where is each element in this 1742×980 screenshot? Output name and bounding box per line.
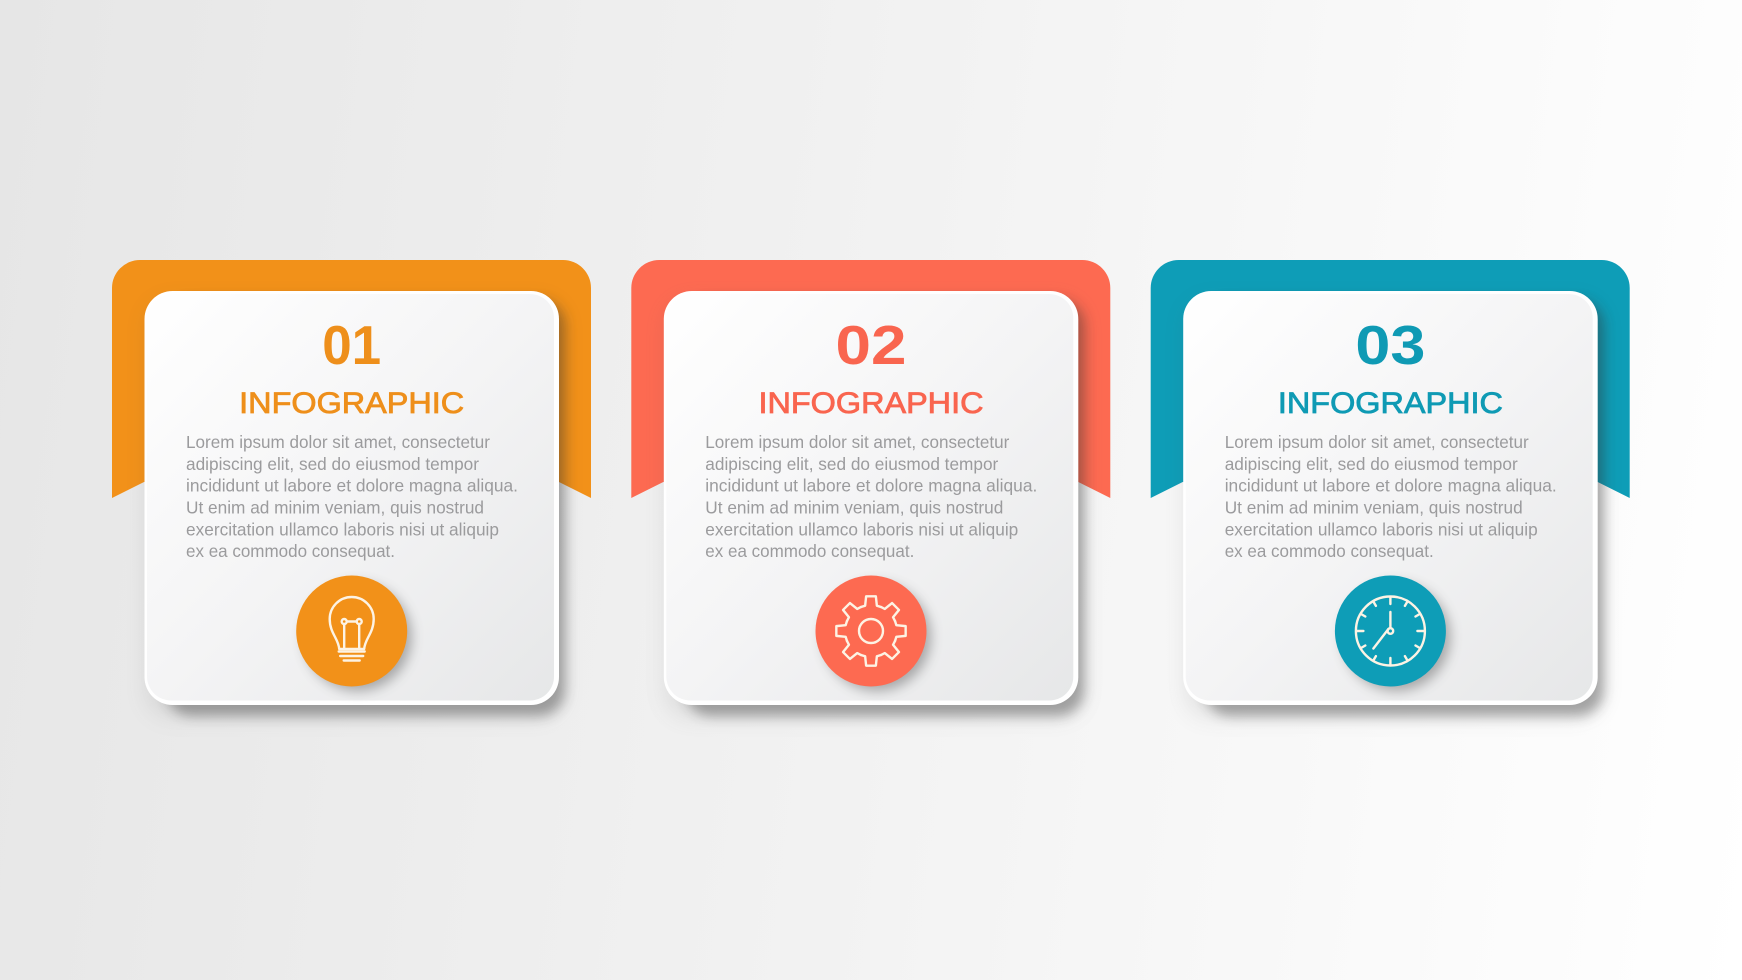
icon: light bulb badge [296,576,412,691]
heading: INFOGRAPHIC [239,387,464,420]
panel: step 02: exercitation ullamco laboris nisi ut aliquip [705,520,1018,540]
number: 03 [1355,314,1425,376]
text block: Lorem ipsum dolor sit amet, consectetur [186,432,490,452]
panel: step 02: Ut enim ad minim veniam, quis nostrud [705,498,1003,518]
panel: step 03: incididunt ut labore et dolore magna aliqua. [1225,476,1557,496]
heading: INFOGRAPHIC [758,387,984,420]
panel: step 01: ex ea commodo consequat. [186,541,395,561]
panel: step 03 [1151,260,1630,718]
card shadow [146,300,565,718]
panel: step 03: Ut enim ad minim veniam, quis nostrud [1225,498,1523,518]
number: 01 [322,314,381,376]
panel: step 02: ex ea commodo consequat. [705,541,914,561]
panel: step 03: adipiscing elit, sed do eiusmod tempor [1225,454,1518,474]
ribbon: orange [112,260,591,498]
panel: step 02: incididunt ut labore et dolore magna aliqua. [705,476,1037,496]
card [1183,291,1598,705]
icon: gear badge [816,576,931,691]
heading: INFOGRAPHIC [1278,387,1503,420]
card shadow [1185,300,1604,718]
panel: step 01: adipiscing elit, sed do eiusmod tempor [186,454,479,474]
panel: step 03: exercitation ullamco laboris nisi ut aliquip [1225,520,1538,540]
panel: step 01: exercitation ullamco laboris nisi ut aliquip [186,520,499,540]
panel: step 02: adipiscing elit, sed do eiusmod tempor [705,454,998,474]
icon: clock badge [1335,576,1450,691]
ribbon: teal [1151,260,1630,498]
text block: Lorem ipsum dolor sit amet, consectetur [705,432,1009,452]
panel: step 03: ex ea commodo consequat. [1225,541,1434,561]
number: 02 [836,314,906,376]
card [664,291,1078,705]
ribbon: coral [631,260,1110,498]
panel: step 02 [631,260,1110,718]
text block: Lorem ipsum dolor sit amet, consectetur [1225,432,1529,452]
card shadow [665,300,1084,718]
panel: step 01: incididunt ut labore et dolore magna aliqua. [186,476,518,496]
panel: step 01 [112,260,591,718]
card [144,291,559,705]
panel: step 01: Ut enim ad minim veniam, quis nostrud [186,498,484,518]
